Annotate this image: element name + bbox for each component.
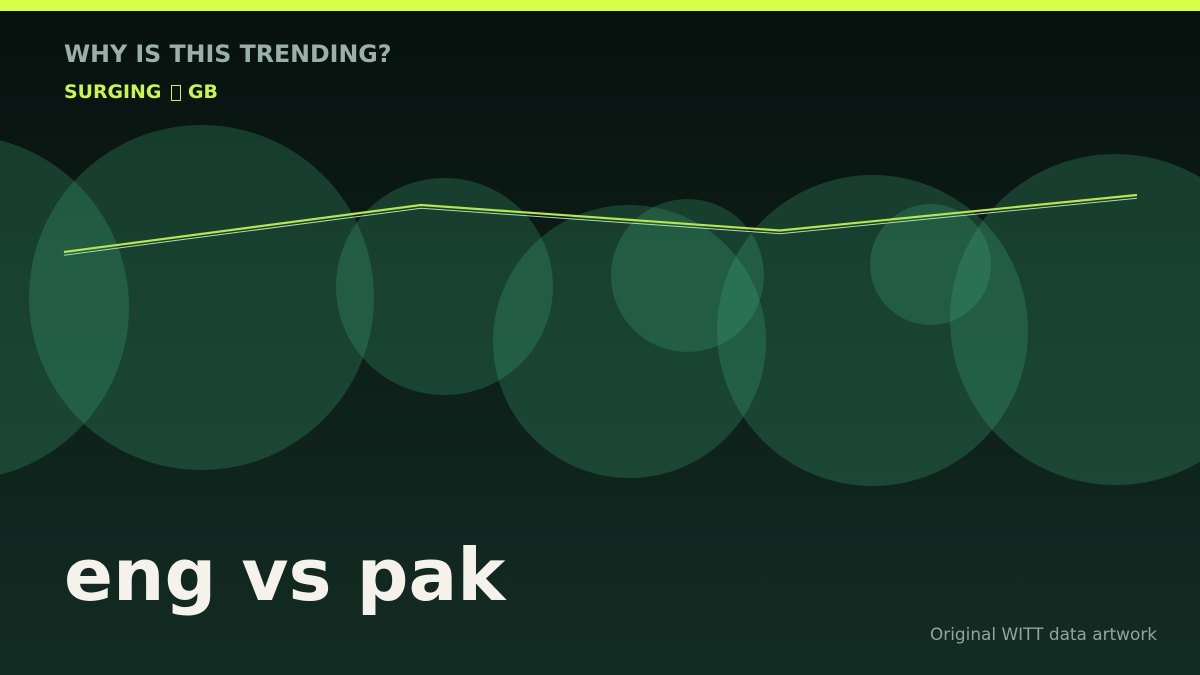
trend line [64, 195, 1137, 255]
bubble cluster [0, 125, 1200, 486]
top accent bar [0, 0, 1200, 11]
status label: surging in GB: GB [188, 81, 218, 103]
heading: why is this trending: WHY IS THIS TRENDING? [64, 40, 391, 68]
status label: surging in GB [64, 81, 218, 103]
footer credit: Original WITT data artwork [930, 624, 1157, 644]
icon: missing glyph box [172, 86, 180, 100]
title: search term: eng vs pak [64, 534, 507, 618]
status label: surging in GB: SURGING [64, 81, 161, 103]
